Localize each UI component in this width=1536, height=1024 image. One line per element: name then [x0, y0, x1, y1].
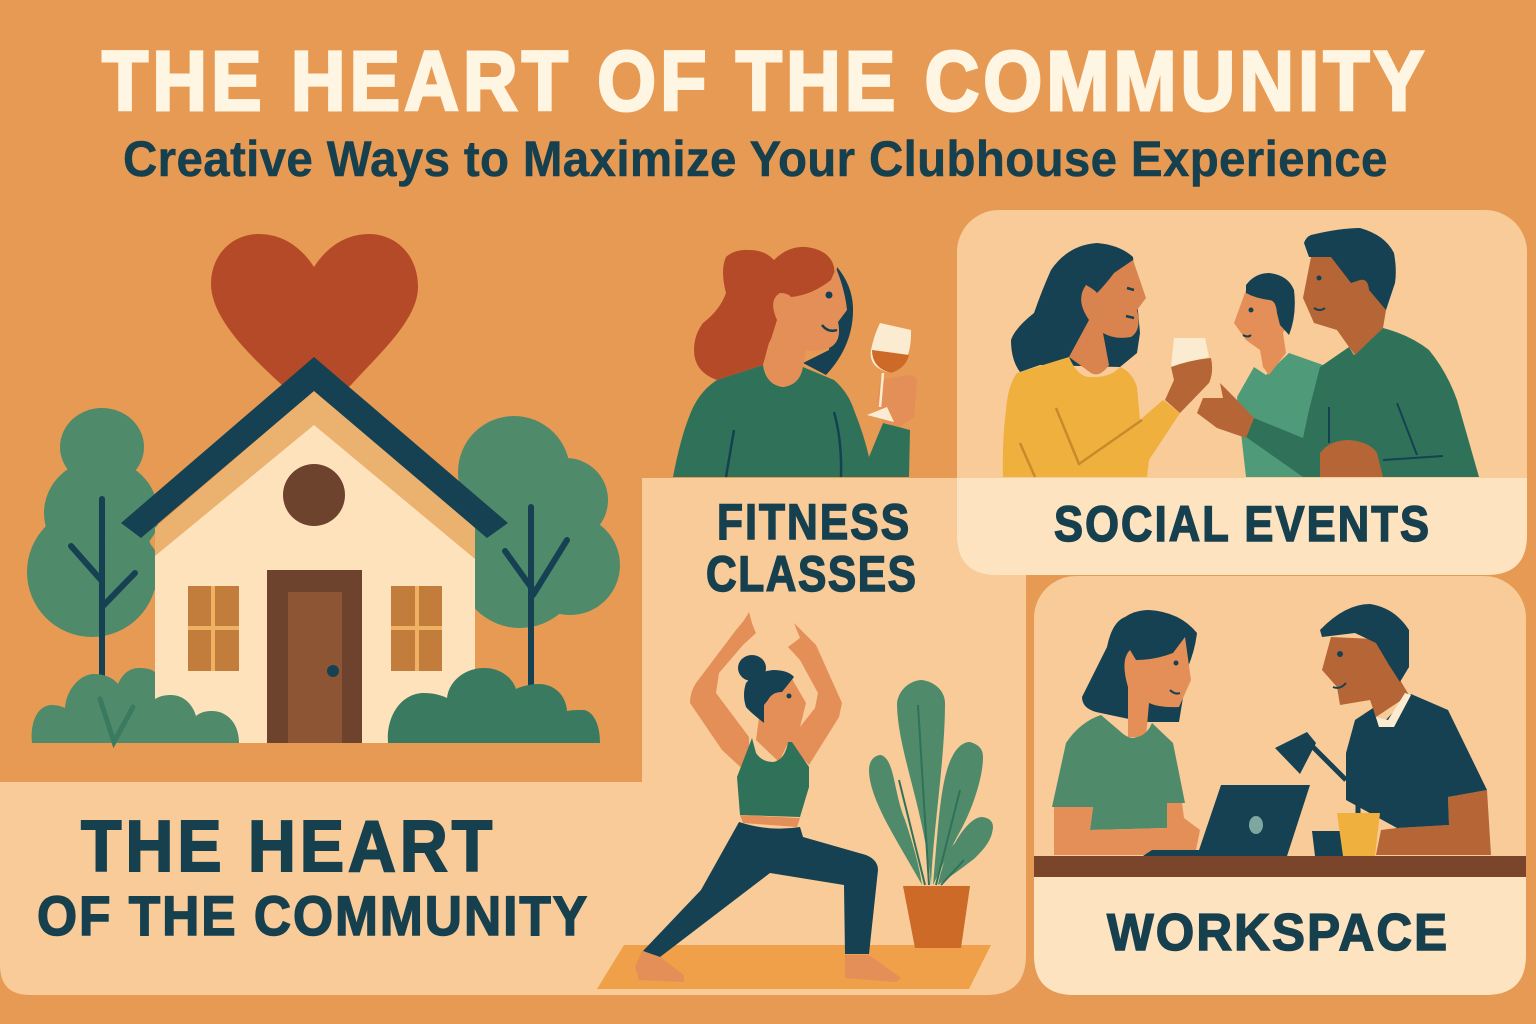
panel: fitness classes: [597, 247, 1026, 995]
yoga woman: [635, 612, 901, 982]
eye: [786, 694, 792, 698]
head: [756, 677, 806, 762]
mug: [1337, 813, 1380, 856]
hair: [1246, 273, 1295, 335]
right window: [391, 586, 442, 671]
shirt: [1237, 353, 1326, 477]
yoga mat: [597, 945, 991, 989]
boy in green: [1234, 273, 1326, 477]
panel: community house: [0, 234, 642, 995]
hair: [1304, 228, 1396, 310]
icon: heart: [211, 234, 418, 415]
collar: [1376, 693, 1411, 727]
panel: social events: [957, 210, 1527, 575]
sweater and arm: [1246, 328, 1479, 477]
label strip: [1034, 875, 1526, 995]
red hair: [694, 247, 835, 380]
label: social events: SOCIAL EVENTS: [1054, 496, 1429, 552]
top: [737, 738, 809, 817]
glass: [1171, 338, 1209, 367]
face and neck: [1069, 260, 1146, 374]
right bushes: [388, 668, 600, 743]
left window: [188, 586, 239, 671]
pot: [903, 886, 970, 948]
shirt: [1346, 694, 1487, 828]
shirt: [1052, 715, 1185, 830]
wine glass: [867, 323, 911, 422]
hair: [1082, 610, 1197, 722]
wine woman illustration: [673, 247, 917, 477]
hair: [1320, 604, 1409, 682]
label heading: OF THE COMMUNITY: [37, 885, 587, 947]
midriff: [740, 815, 800, 827]
right arm: [788, 623, 842, 765]
plant: [869, 680, 993, 948]
open hand: [1197, 383, 1254, 438]
panel background: [642, 478, 1026, 995]
walls: [155, 391, 475, 743]
face and neck: [1124, 637, 1191, 737]
panel background: [957, 210, 1527, 575]
man in green: [1197, 228, 1479, 477]
door: [267, 570, 362, 743]
eye and smile: [822, 292, 837, 331]
eye and mouth: [1126, 288, 1134, 318]
hair: [738, 655, 794, 723]
house: [121, 357, 508, 743]
left tree: [27, 408, 160, 676]
roof: [121, 357, 508, 538]
hand: [1165, 358, 1212, 413]
feet: [635, 951, 684, 982]
woman in yellow: [1003, 243, 1212, 477]
panel background: [1034, 576, 1526, 995]
hair: [1011, 243, 1140, 372]
hand: [877, 375, 917, 427]
arms: [1054, 807, 1093, 855]
face: [1322, 637, 1409, 717]
left arm: [690, 612, 756, 775]
label panel background: [0, 782, 642, 995]
label: workspace: WORKSPACE: [1107, 903, 1447, 961]
sweater: [673, 365, 910, 477]
label: fitness classes: CLASSES: [706, 546, 916, 602]
lower hand: [1320, 440, 1383, 477]
dark back hair: [803, 267, 853, 375]
round window: [283, 464, 345, 526]
panel: workspace: [1034, 576, 1526, 995]
label: fitness classes: [706, 494, 916, 602]
desk lamp: [1275, 732, 1358, 813]
face and neck: [763, 268, 847, 386]
label heading: THE HEART: [81, 805, 492, 887]
laptop: [1143, 785, 1310, 856]
dark cup: [1312, 831, 1343, 856]
sweater: [1003, 357, 1180, 477]
arm: [1376, 790, 1491, 855]
left bushes: [32, 668, 239, 743]
woman with laptop: [1052, 610, 1200, 855]
man with shirt: [1320, 604, 1491, 855]
label heading: [37, 805, 587, 947]
desk: [1034, 856, 1526, 877]
right tree: [458, 416, 620, 686]
label: fitness classes: FITNESS: [717, 494, 909, 550]
label strip: [957, 478, 1527, 575]
legs: [643, 822, 878, 957]
subtitle: Creative Ways to Maximize Your Clubhouse Experience: [123, 132, 1387, 187]
sleeve lines: [1329, 403, 1443, 460]
head: [1234, 290, 1289, 375]
title: THE HEART OF THE COMMUNITY: [102, 34, 1424, 128]
head: [1303, 250, 1386, 355]
gable trim: [155, 391, 475, 559]
